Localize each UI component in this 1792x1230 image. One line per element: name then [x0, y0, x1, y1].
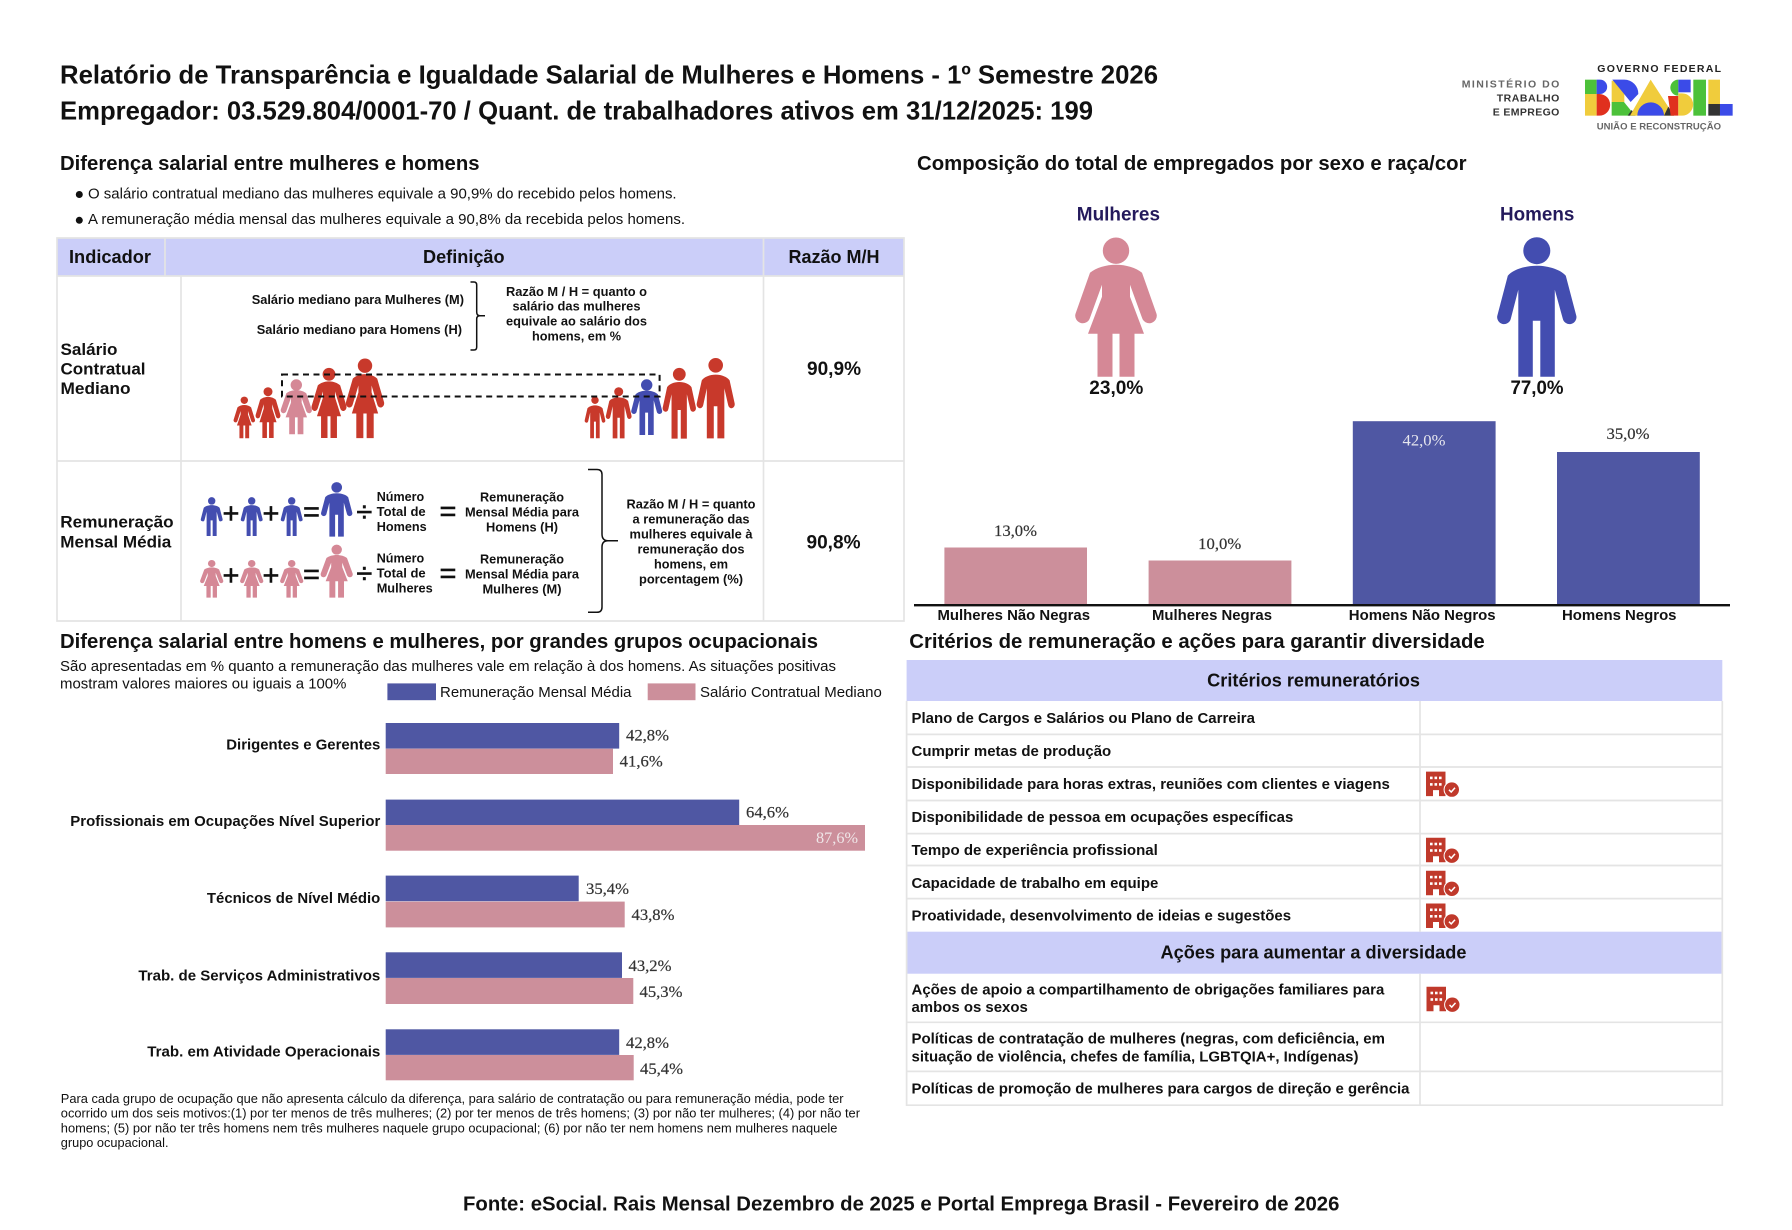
description [60, 659, 836, 692]
row: remuneração mensal média: remuneração dos [638, 541, 744, 556]
description: mostram valores maiores ou iguais a 100% [60, 676, 347, 692]
bar chart: 42,8% [626, 728, 669, 745]
icon: mulheres 23,0%: 23,0% [1089, 377, 1143, 399]
criteria rows [912, 711, 1410, 1098]
bar chart: Dirigentes e Gerentes [226, 736, 380, 754]
footnote: homens; (5) por não ter três homens nem três mulheres naquele grupo ocupacional; (6) por não ter nem homens nem mulheres naquele [61, 1120, 837, 1135]
panel: grupos ocupacionais [60, 631, 882, 1150]
brace [588, 470, 618, 612]
legend [387, 683, 882, 701]
source footer: Fonte: eSocial. Rais Mensal Dezembro de 2025 e Portal Emprega Brasil - Fevereiro de 2026 [463, 1194, 1339, 1216]
criteria rows: Capacidade de trabalho em equipe [912, 876, 1158, 892]
column chart: Mulheres Não Negras [938, 608, 1090, 624]
formula: mulheres: Total de [377, 566, 426, 581]
icon: mulheres em ordem salarial [234, 358, 384, 438]
bar chart: 35,4% [586, 881, 629, 898]
bar chart: 45,4% [640, 1061, 683, 1078]
row: salário contratual mediano [60, 282, 861, 439]
panel: critérios de remuneração e ações [907, 631, 1722, 1105]
bar chart: 87,6% [816, 830, 858, 847]
panel: composição do total de empregados [914, 153, 1730, 624]
criteria table [907, 660, 1722, 1105]
formula: homens: Remuneração [480, 490, 564, 505]
formula: mulheres: Mensal Média para [465, 566, 580, 581]
criteria rows: situação de violência, chefes de família, LGBTQIA+, Indígenas) [912, 1049, 1359, 1065]
heading: Diferença salarial entre mulheres e homens [60, 153, 479, 175]
row: salário contratual mediano: salário das mulheres [512, 298, 640, 314]
row: salário contratual mediano: 90,9% [807, 358, 861, 380]
formula: homens: + [263, 498, 279, 530]
footnote [61, 1091, 861, 1150]
formula: homens: Mensal Média para [465, 505, 580, 520]
table header: critérios remuneratórios: Critérios remuneratórios [1207, 670, 1420, 690]
footnote: Para cada grupo de ocupação que não apresenta cálculo da diferença, para salário de contratação ou para remuneração média, pode ter [61, 1091, 844, 1106]
row: remuneração mensal média: a remuneração das [632, 511, 750, 526]
criteria rows: Plano de Cargos e Salários ou Plano de Carreira [912, 711, 1256, 727]
row: remuneração mensal média: porcentagem (%) [639, 571, 743, 586]
bar chart: 42,8% [626, 1035, 669, 1052]
icon: homens 77,0% [1497, 205, 1576, 399]
formula: homens: = [440, 496, 456, 528]
formula: homens: Homens (H) [486, 520, 558, 535]
bar chart: 43,2% [628, 958, 672, 975]
row: remuneração mensal média: homens, em [654, 556, 728, 571]
brace [470, 282, 485, 350]
logo: ministério e governo federal: TRABALHO [1497, 93, 1559, 105]
description: São apresentadas em % quanto a remuneração das mulheres vale em relação à dos homens. As situações positivas [60, 659, 836, 675]
formula: mulheres: = [303, 559, 320, 591]
bar chart [70, 723, 865, 1080]
icon: mulheres 23,0% [1075, 205, 1160, 399]
column chart: 13,0% [994, 523, 1037, 540]
bar chart: 64,6% [746, 804, 789, 822]
row: salário contratual mediano: Salário mediano para Mulheres (M) [252, 292, 464, 307]
icon: mulheres 23,0%: Mulheres [1077, 205, 1160, 226]
column chart: 42,0% [1402, 433, 1446, 450]
formula: homens: Total de [377, 504, 426, 519]
row: salário contratual mediano: Salário [60, 340, 118, 359]
row: remuneração mensal média: Razão M / H = quanto [626, 496, 756, 511]
formula: homens: = [303, 496, 320, 528]
row: remuneração mensal média [60, 470, 861, 612]
formula: mulheres: Mulheres (M) [482, 581, 562, 596]
row: remuneração mensal média: 90,8% [806, 531, 860, 553]
bar chart: 41,6% [620, 754, 663, 771]
icon: homens 77,0%: Homens [1500, 205, 1574, 226]
icons: empresa com check [1426, 772, 1460, 1013]
column chart: 10,0% [1198, 536, 1241, 553]
formula: mulheres: + [263, 560, 279, 592]
row: salário contratual mediano: Razão M / H = quanto o [506, 284, 647, 299]
heading: Composição do total de empregados por sexo e raça/cor [917, 153, 1467, 175]
bar chart: Trab. de Serviços Administrativos [138, 967, 380, 984]
formula: mulheres: ÷ [356, 558, 372, 590]
row: salário contratual mediano: Salário mediano para Homens (H) [257, 322, 462, 337]
criteria rows: ambos os sexos [912, 1000, 1028, 1016]
bullet text 2: A remuneração média mensal das mulheres equivale a 90,8% da recebida pelos homens. [88, 211, 685, 228]
bar chart: 45,3% [640, 984, 682, 1001]
column chart: Mulheres Negras [1152, 608, 1272, 624]
row: remuneração mensal média: Mensal Média [60, 532, 172, 551]
title: Relatório de Transparência e Igualdade Salarial de Mulheres e Homens - 1º Semestre 2026 [60, 62, 1158, 90]
title [60, 62, 1158, 126]
heading: Critérios de remuneração e ações para garantir diversidade [909, 631, 1485, 653]
column chart: Homens Negros [1562, 608, 1676, 624]
criteria rows: Disponibilidade para horas extras, reuniões com clientes e viagens [912, 777, 1390, 793]
bar chart: 43,8% [632, 907, 674, 924]
formula: mulheres: = [440, 558, 456, 590]
logo: ministério e governo federal [1462, 63, 1733, 132]
table header: Definição [423, 246, 505, 267]
icon: homens em ordem salarial [585, 358, 735, 439]
logo: ministério e governo federal: UNIÃO E RECONSTRUÇÃO [1597, 121, 1721, 132]
criteria rows: Políticas de contratação de mulheres (negras, com deficiência, em [912, 1032, 1385, 1048]
formula: homens: + [223, 498, 239, 530]
formula: mulheres: + [223, 560, 239, 592]
criteria rows: Tempo de experiência profissional [912, 843, 1158, 859]
title: Empregador: 03.529.804/0001-70 / Quant. de trabalhadores ativos em 31/12/2025: 199 [60, 98, 1093, 126]
row: salário contratual mediano: Contratual [60, 360, 146, 378]
bar chart: Técnicos de Nível Médio [207, 890, 380, 907]
formula: homens: ÷ [356, 496, 372, 528]
table header: Razão M/H [788, 246, 880, 267]
footnote: ocorrido um dos seis motivos:(1) por ter menos de três mulheres; (2) por ter menos de três homens; (3) por não ter mulheres; (4) por não ter [61, 1106, 861, 1121]
bar chart: Trab. em Atividade Operacionais [147, 1043, 380, 1060]
row: salário contratual mediano: homens, em % [532, 328, 622, 344]
legend: Salário Contratual Mediano [700, 684, 882, 701]
row: remuneração mensal média: Remuneração [60, 512, 174, 531]
criteria rows: Políticas de promoção de mulheres para cargos de direção e gerência [912, 1082, 1410, 1098]
formula: mulheres: Número [377, 551, 424, 566]
row: salário contratual mediano: Mediano [60, 379, 130, 398]
criteria rows: Proatividade, desenvolvimento de ideias e sugestões [912, 909, 1291, 925]
criteria rows: Ações de apoio a compartilhamento de obrigações familiares para [912, 983, 1385, 999]
formula: mulheres: Remuneração [480, 551, 564, 566]
logo: ministério e governo federal: GOVERNO FEDERAL [1597, 63, 1722, 75]
legend: Remuneração Mensal Média [440, 684, 632, 701]
column chart: 35,0% [1606, 426, 1650, 443]
heading: Diferença salarial entre homens e mulheres, por grandes grupos ocupacionais [60, 631, 818, 653]
bullet text 1: O salário contratual mediano das mulheres equivale a 90,9% do recebido pelos homens. [88, 186, 677, 202]
criteria rows: Disponibilidade de pessoa em ocupações específicas [912, 810, 1293, 826]
footnote: grupo ocupacional. [61, 1135, 168, 1150]
formula: homens: Número [377, 489, 424, 504]
logo: ministério e governo federal: MINISTÉRIO DO [1462, 77, 1559, 90]
formula: homens: Homens [377, 519, 427, 534]
table header: Indicador [69, 246, 151, 267]
indicator table [57, 238, 904, 621]
icon: homens 77,0%: 77,0% [1510, 377, 1564, 399]
column chart [914, 421, 1730, 624]
row: salário contratual mediano: equivale ao salário dos [506, 314, 647, 328]
formula: mulheres [200, 545, 580, 598]
criteria rows: Cumprir metas de produção [912, 744, 1111, 760]
table header: ações: Ações para aumentar a diversidade [1160, 942, 1466, 962]
column chart: Homens Não Negros [1349, 608, 1496, 624]
panel: diferença salarial entre mulheres e homens [57, 153, 904, 621]
formula: mulheres: Mulheres [377, 581, 433, 596]
bar chart: Profissionais em Ocupações Nível Superior [70, 813, 380, 830]
row: remuneração mensal média: mulheres equivale à [630, 526, 753, 541]
formula: homens [201, 482, 580, 537]
table header [69, 246, 880, 267]
logo: ministério e governo federal: E EMPREGO [1493, 107, 1559, 119]
